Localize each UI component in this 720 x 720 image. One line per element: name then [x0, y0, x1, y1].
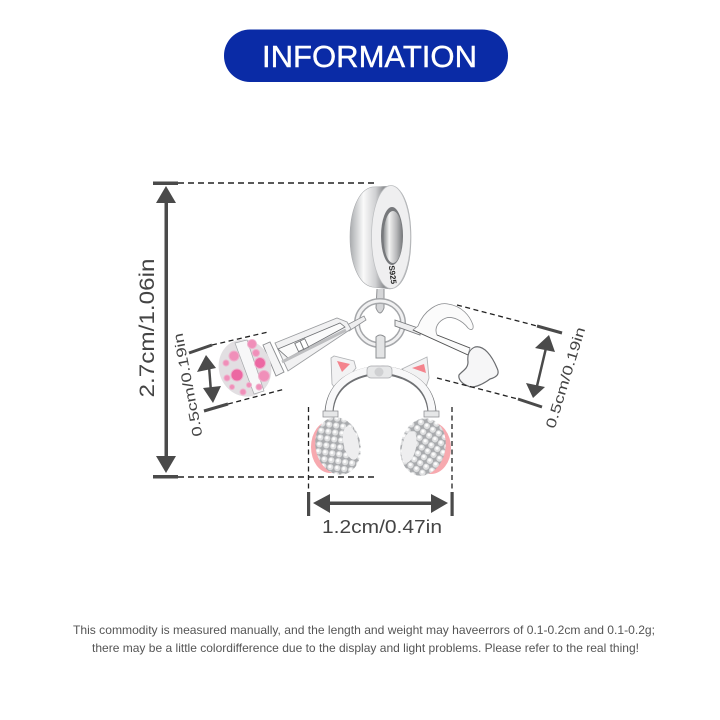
dimension: total height 2.7cm/1.06in: 2.7cm/1.06in: [136, 258, 159, 398]
disclaimer note: [73, 623, 655, 655]
dimension: microphone width 0.5cm/0.19in: [170, 332, 285, 438]
cat ears: [331, 356, 429, 391]
dimension: headphones width 1.2cm/0.47in: 1.2cm/0.47in: [322, 517, 442, 537]
dimension: arrow width 0.5cm/0.19in: [437, 305, 588, 430]
dimension: total height 2.7cm/1.06in: [136, 182, 375, 478]
ear cup left: [310, 413, 366, 479]
charm: connector rings: [357, 289, 403, 358]
disclaimer note: This commodity is measured manually, and the length and weight may haveerrors of 0.1-0.2cm and 0.1-0.2g;: [73, 623, 655, 637]
dimension: headphones width 1.2cm/0.47in: [307, 407, 454, 537]
title banner: [224, 30, 508, 82]
dimension: arrow width 0.5cm/0.19in: 0.5cm/0.19in: [542, 325, 588, 430]
charm: bail bead: S925: [387, 265, 398, 285]
headband: [329, 370, 432, 412]
pink stones: [223, 340, 270, 395]
disclaimer note: there may be a little colordifference due to the display and light problems. Please refer to the real thing!: [92, 641, 639, 655]
title banner: INFORMATION: [262, 39, 477, 74]
charm: heart-tipped arrow: [395, 304, 498, 387]
dimension: microphone width 0.5cm/0.19in: 0.5cm/0.19in: [170, 332, 205, 438]
ear cup right: [395, 414, 451, 480]
charm: microphone: [211, 316, 366, 404]
charm: bail bead: [350, 186, 411, 289]
charm: cat-ear headphones: [310, 356, 451, 480]
